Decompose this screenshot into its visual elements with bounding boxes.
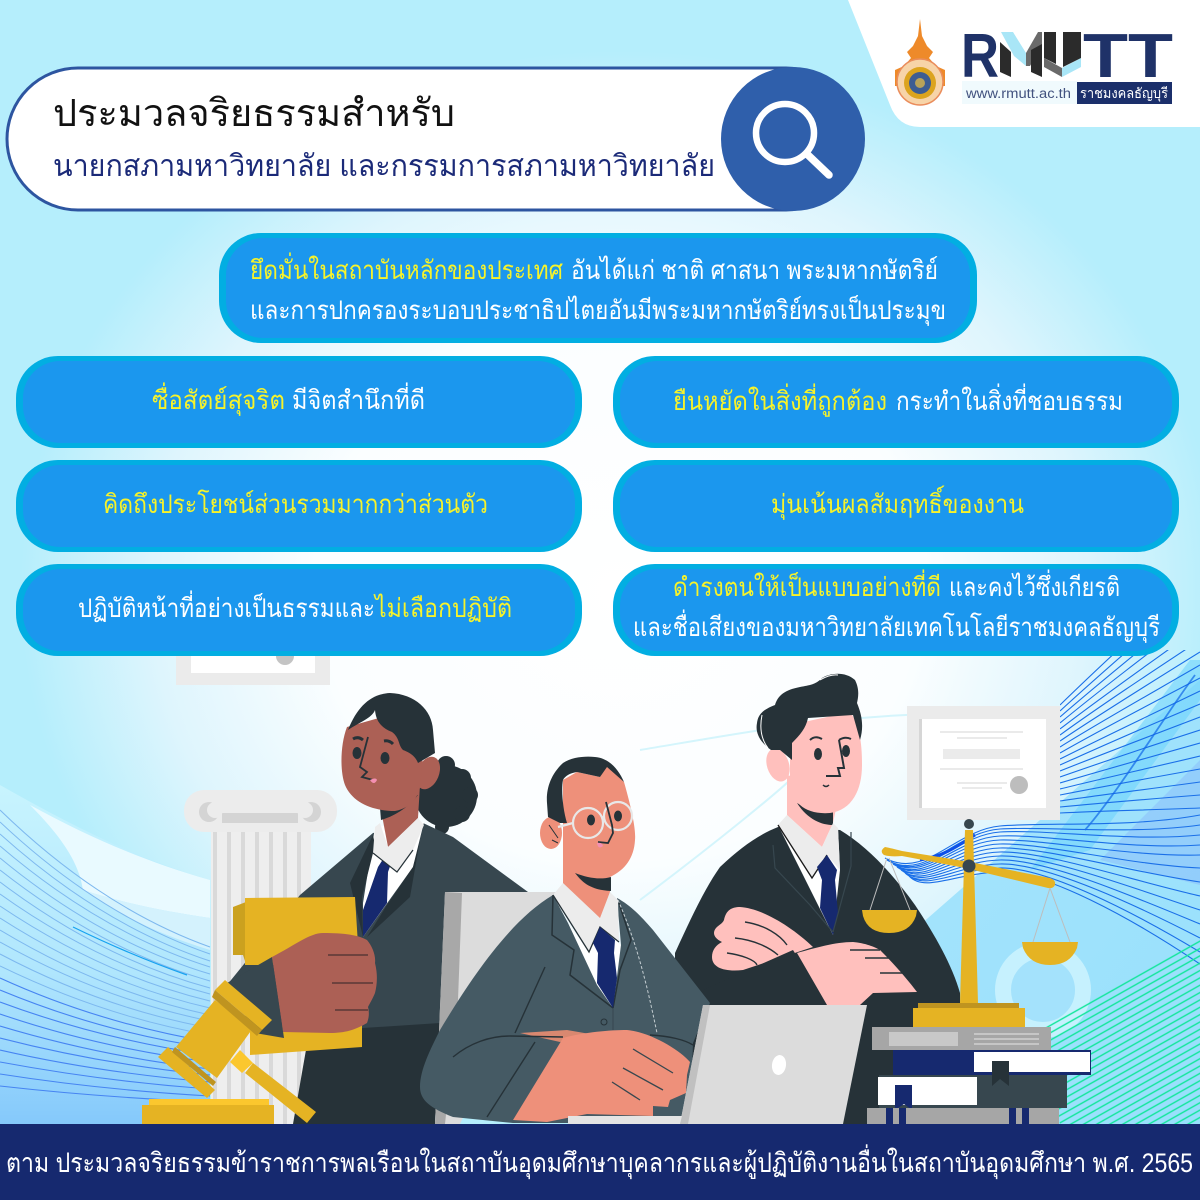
illustration: column	[184, 790, 337, 1124]
panel: steadfastness: ยืนหยัดในสิ่งที่ถูกต้อง	[673, 383, 887, 417]
panel: role model	[613, 564, 1179, 656]
illustration: gavel	[142, 980, 316, 1124]
suit	[420, 895, 710, 1123]
panel: role model: และคงไว้ซึ่งเกียรติ	[949, 569, 1120, 602]
illustration: book stack	[867, 1027, 1091, 1124]
subheading: นายกสภามหาวิทยาลัย และกรรมการสภามหาวิทยาลัย	[53, 150, 715, 183]
logo wordmark: www.rmutt.ac.th	[965, 86, 1071, 101]
face	[790, 712, 862, 813]
heading: ประมวลจริยธรรมสำหรับ	[53, 93, 455, 135]
tie	[593, 927, 617, 1008]
neck	[380, 785, 420, 847]
panel: institutions: ยึดมั่นในสถาบันหลักของประเทศ	[250, 252, 563, 285]
hair	[757, 674, 862, 760]
icon: magnifying glass	[721, 67, 865, 211]
crossed arms	[712, 907, 813, 970]
panel: results: มุ่นเน้นผลสัมฤทธิ์ของงาน	[771, 485, 1024, 520]
panel: institutions: และการปกครองระบอบประชาธิปไตยอันมีพระมหากษัตริย์ทรงเป็นประมุข	[250, 294, 946, 326]
shirt	[778, 825, 840, 935]
icon: university seal	[895, 19, 945, 105]
panel: results	[613, 460, 1179, 552]
illustration: man at right	[675, 674, 962, 1124]
face	[341, 712, 424, 811]
shirt	[568, 923, 621, 1008]
panel: public interest: คิดถึงประโยชน์ส่วนรวมมากกว่าส่วนตัว	[103, 489, 488, 519]
panel: fairness: ปฏิบัติหน้าที่อย่างเป็นธรรมและ	[78, 590, 375, 623]
illustration: man in centre	[420, 757, 710, 1123]
skirt	[293, 1020, 440, 1124]
suit	[675, 827, 962, 1124]
panel: fairness	[16, 564, 582, 656]
logo wordmark: TT	[1083, 22, 1173, 91]
title pill	[7, 67, 865, 211]
illustration: scales of justice	[862, 819, 1078, 1027]
logo wordmark: R	[961, 22, 999, 91]
ear	[411, 753, 445, 793]
hair	[348, 693, 435, 763]
panel: fairness: ไม่เลือกปฏิบัติ	[373, 593, 512, 623]
panel: institutions	[219, 233, 977, 343]
tie	[817, 855, 838, 935]
neck and face	[563, 765, 635, 920]
illustration: laptop	[568, 1005, 867, 1124]
neck	[787, 775, 840, 847]
illustration: woman	[227, 693, 528, 1124]
panel: honesty: ซื่อสัตย์สุจริต	[152, 382, 285, 416]
panel: honesty	[16, 356, 582, 448]
jacket	[227, 823, 528, 1038]
panel: honesty: มีจิตสำนึกที่ดี	[292, 382, 425, 415]
ear	[540, 817, 562, 849]
collar	[553, 883, 619, 952]
panel: institutions: อันได้แก่ ชาติ ศาสนา พระมหากษัตริย์	[571, 255, 938, 285]
tie	[363, 853, 393, 937]
panel: steadfastness: กระทำในสิ่งที่ชอบธรรม	[896, 383, 1123, 416]
ear	[762, 745, 794, 785]
panel: steadfastness	[613, 356, 1179, 448]
illustration: left certificate frame	[176, 656, 330, 685]
collar	[373, 818, 424, 872]
illustration: chair	[435, 892, 560, 1124]
logo wordmark: ราชมงคลธัญบุรี	[1080, 85, 1168, 102]
panel: role model: ดำรงตนให้เป็นแบบอย่างที่ดี	[673, 569, 941, 602]
lower wave lines	[885, 815, 1200, 964]
illustration: certificate frame	[907, 706, 1060, 820]
hair bun	[415, 756, 478, 834]
back arm and hand	[520, 1030, 590, 1042]
collar	[778, 815, 840, 878]
glasses	[558, 802, 632, 838]
hand	[272, 933, 377, 1033]
logo wordmark	[961, 22, 1173, 104]
upper wave lines	[1060, 650, 1200, 814]
footer band	[0, 1124, 1200, 1200]
panel: public interest	[16, 460, 582, 552]
sleeve	[227, 957, 284, 1038]
hair	[547, 757, 624, 823]
shirt	[363, 822, 424, 937]
illustration: folder held by woman	[227, 897, 377, 1055]
logo panel	[848, 0, 1200, 127]
